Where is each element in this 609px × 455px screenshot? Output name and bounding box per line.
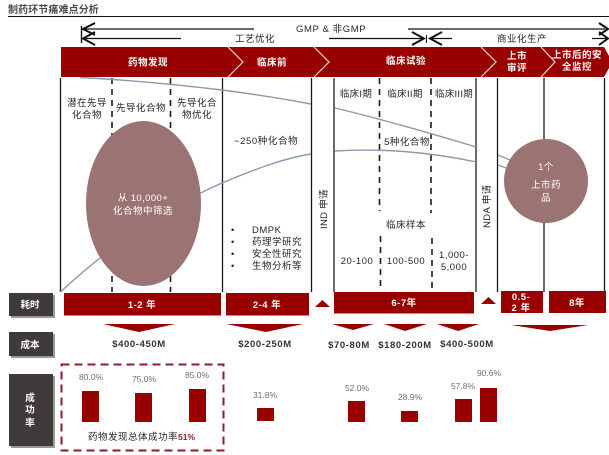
compound stage labels: 化合物 <box>72 109 102 121</box>
row label: success rate: 功 <box>25 404 35 416</box>
preclinical work list: DMPK <box>252 225 282 236</box>
funnel curves <box>60 78 510 292</box>
label: process optimisation: 工艺优化 <box>235 33 275 45</box>
preclinical work list <box>231 225 302 272</box>
clinical samples: 5,000 <box>441 262 467 273</box>
arrow: commercial left <box>426 32 452 45</box>
row label: cost <box>9 332 55 358</box>
panel: discovery success rate: 药物发现总体成功率51% <box>88 431 195 443</box>
bar chart: success rates: 31.8% <box>253 390 277 400</box>
bar chart: success rates <box>79 368 501 422</box>
stage banner: 临床前 <box>257 56 287 68</box>
circle: one marketed drug: 品 <box>541 193 551 204</box>
clinical samples: 临床样本 <box>386 219 426 231</box>
label: commercial production: 商业化生产 <box>497 33 547 45</box>
clinical samples: 20-100 <box>341 256 373 267</box>
preclinical work list: • <box>231 225 235 236</box>
bar chart: success rates: 80.0% <box>79 372 103 382</box>
cost values: $400-450M <box>112 339 166 350</box>
stage banner: 审评 <box>507 62 527 74</box>
clinical phase labels: 临床II期 <box>387 88 423 100</box>
cost arrows <box>103 324 588 332</box>
clinical compound count: 5种化合物 <box>384 136 430 148</box>
cost values: $180-200M <box>378 340 432 351</box>
duration bars: 6-7年 <box>391 297 417 309</box>
clinical samples: 1,000- <box>439 250 469 261</box>
label: GMP: GMP & 非GMP <box>296 23 366 35</box>
cost values: $200-250M <box>238 339 292 350</box>
duration bars: 2 年 <box>512 302 530 314</box>
bar chart: success rates: 28.9% <box>398 392 422 402</box>
clinical samples: 100-500 <box>387 256 425 267</box>
compound stage labels <box>67 97 217 121</box>
NDA filing label: NDA 申请 <box>481 184 493 228</box>
clinical samples <box>341 219 469 273</box>
panel: discovery success rate <box>62 364 224 450</box>
arrow: GMP left <box>83 23 254 35</box>
circle: one marketed drug: 1个 <box>538 162 554 173</box>
preclinical work list: 药理学研究 <box>252 236 302 248</box>
stage banner: 药物发现 <box>128 56 168 68</box>
ellipse: compound screening <box>86 121 201 286</box>
stage divider lines <box>60 78 604 292</box>
bar chart: success rates: 85.0% <box>185 370 209 380</box>
row label: time: 耗时 <box>20 299 40 311</box>
clinical phase labels: 临床I期 <box>340 88 372 100</box>
IND filing label: IND 申请 <box>318 189 330 229</box>
duration bars: 1-2 年 <box>128 299 156 311</box>
ellipse: compound screening: 化合物中筛选 <box>113 205 173 217</box>
stage banner: 上市 <box>507 50 527 62</box>
compound stage labels: 先导化合物 <box>116 102 166 114</box>
duration bars <box>64 291 606 316</box>
preclinical work list: • <box>231 261 235 272</box>
bar chart: success rates: 52.0% <box>345 383 369 393</box>
row label: cost: 成本 <box>20 339 40 351</box>
preclinical text: ~250种化合物 <box>234 135 298 147</box>
row label: success rate <box>9 374 55 448</box>
preclinical work list: 生物分析等 <box>252 260 302 272</box>
clinical phase labels <box>340 88 473 100</box>
preclinical work list: • <box>231 237 235 248</box>
row label: time <box>9 293 55 318</box>
bar chart: success rates: 75.0% <box>132 374 156 384</box>
compound stage labels: 先导化合 <box>177 97 217 109</box>
row label: success rate: 成 <box>25 392 35 404</box>
arrow: commercial right <box>592 32 608 45</box>
duration bars: 0.5- <box>512 292 530 303</box>
duration bars: 2-4 年 <box>253 299 281 311</box>
arrow: process optimisation <box>82 26 181 45</box>
bar chart: success rates: 57.8% <box>451 381 475 391</box>
circle: one marketed drug: 上市药 <box>531 179 561 191</box>
clinical phase labels: 临床III期 <box>435 88 473 100</box>
arrow: GMP right <box>408 23 608 35</box>
duration bars: 8年 <box>569 297 585 309</box>
stage banner: 临床试验 <box>386 55 426 67</box>
arrow: to commercial boundary <box>329 32 424 45</box>
ellipse: compound screening: 从 10,000+ <box>118 193 168 204</box>
stage banner <box>61 47 609 77</box>
cost values: $400-500M <box>440 339 494 350</box>
preclinical work list: • <box>231 249 235 260</box>
row label: success rate: 率 <box>25 417 35 429</box>
stage banner: 全监控 <box>562 61 592 73</box>
process arrows <box>82 23 608 45</box>
cost values <box>112 339 494 351</box>
compound stage labels: 潜在先导 <box>67 97 107 109</box>
cost values: $70-80M <box>328 340 370 351</box>
stage banner: 上市后的安 <box>552 49 602 61</box>
bar chart: success rates: 90.6% <box>477 368 501 378</box>
compound stage labels: 物优化 <box>182 109 212 121</box>
preclinical work list: 安全性研究 <box>252 248 302 260</box>
title: 制药环节痛难点分析 <box>8 3 99 16</box>
circle: one marketed drug <box>504 139 588 223</box>
